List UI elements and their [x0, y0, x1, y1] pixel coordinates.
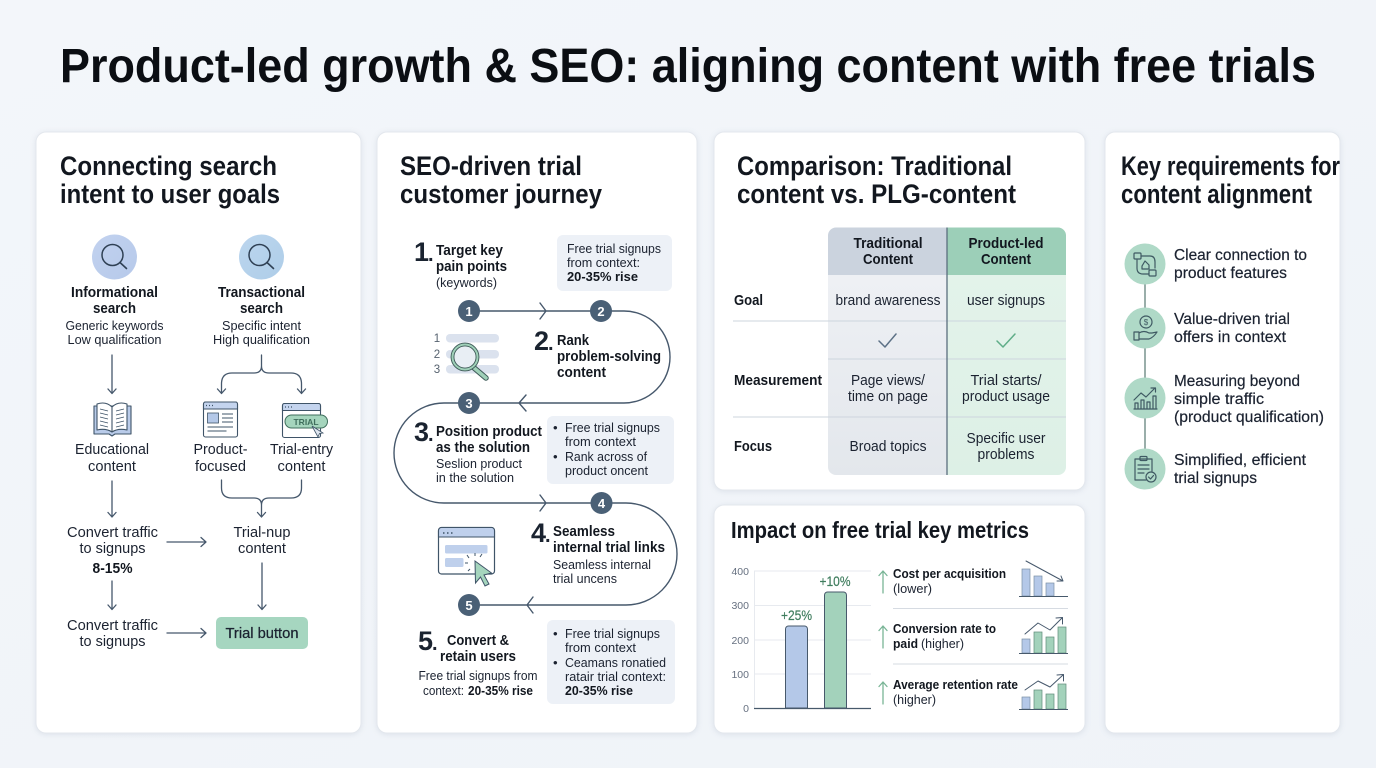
row: focus: Specific user: [966, 430, 1046, 447]
icon: clipboard signup: [1124, 448, 1166, 490]
callout: step 3 bullets: product oncent: [565, 463, 648, 478]
text: value-driven trial offers: offers in context: [1174, 329, 1287, 346]
heading: key requirements: [1121, 151, 1340, 209]
arrow: merge to trial-nup: [222, 480, 302, 517]
label: educational content: content: [88, 458, 137, 475]
arrow: transactional branch: [218, 355, 306, 394]
row: focus: Broad topics: [850, 438, 926, 455]
callout: step 3 bullets: Rank across of: [565, 449, 647, 464]
icon: check product-led: [997, 334, 1015, 347]
row: focus: Focus: [734, 438, 772, 455]
metric: conversion rate to paid: [879, 618, 1068, 654]
button: trial button: Trial button: [226, 625, 298, 642]
icon: trial entry browser with button: [282, 404, 328, 438]
callout: 20-35% rise: [557, 235, 672, 291]
icon: product page browser: [204, 402, 238, 437]
panel: connecting search intent to user goals: [36, 132, 361, 733]
text: measuring beyond traffic: Measuring beyond: [1174, 373, 1300, 390]
text: convert traffic to signups: Convert traffic: [67, 617, 158, 634]
label: educational content: Educational: [75, 441, 149, 458]
icon: ranked list with magnifier: [434, 333, 499, 378]
step 3 text: .: [428, 424, 434, 446]
step 1 text: Target key: [436, 242, 504, 259]
icon: trial entry browser with button: TRIAL: [293, 417, 319, 427]
step 2 text: problem-solving: [557, 348, 661, 365]
step 5 text: 5: [418, 626, 433, 656]
step marker 5: 5: [465, 598, 473, 613]
step 5 text: retain users: [440, 648, 516, 665]
text: trial-nup content: Trial-nup: [234, 524, 290, 541]
icon: open book: [94, 403, 131, 436]
icon: value offer hand: [1124, 308, 1166, 348]
icon: ranked list with magnifier: 3: [434, 364, 440, 376]
text: transactional search: Specific intent: [222, 318, 301, 333]
row: goal: user signups: [967, 292, 1045, 309]
step 2 text: 2: [534, 326, 549, 356]
callout: step 5 bullets: [547, 620, 675, 704]
panel: SEO-driven trial customer journey: [377, 132, 697, 733]
arrow: to trial button: [167, 628, 206, 638]
panel: comparison table: [714, 132, 1085, 490]
step 2 text: .: [548, 333, 554, 355]
text: convert traffic to signups: to signups: [80, 633, 146, 650]
text: informational search: Low qualification: [68, 332, 162, 347]
text: clear connection: product features: [1174, 265, 1287, 282]
step 2 text: content: [557, 364, 606, 381]
step 4 text: internal trial links: [553, 539, 665, 556]
text: convert traffic 8-15%: Convert traffic: [67, 524, 158, 541]
metric: cost per acquisition: [879, 561, 1068, 596]
heading: SEO-driven journey: customer journey: [400, 179, 602, 209]
journey path: [394, 303, 677, 613]
metric: conversion rate to paid: paid: [893, 637, 918, 651]
icon: browser with cursor: [438, 528, 494, 586]
step marker 3: [458, 392, 480, 414]
text: clear connection: Clear connection to: [1174, 247, 1307, 264]
text: trial-nup content: [234, 524, 290, 557]
callout: step 5 bullets: 20-35% rise: [565, 683, 633, 698]
callout: step 5 bullets: •: [553, 626, 558, 641]
step 3 text: Position product: [436, 423, 542, 440]
row: goal: [734, 292, 1045, 309]
text: convert traffic 8-15%: [67, 524, 158, 577]
icon: check traditional: [879, 334, 896, 347]
metric: conversion rate to paid: Conversion rate to: [893, 622, 996, 636]
step marker 2: 2: [597, 304, 605, 319]
heading: connecting search: [60, 151, 280, 209]
text: value-driven trial offers: Value-driven trial: [1174, 311, 1290, 328]
bar chart: [731, 566, 871, 715]
metric: average retention rate: Average retention rate: [893, 678, 1018, 692]
arrow: informational to educational: [108, 355, 116, 394]
row: focus: [734, 430, 1046, 463]
text: trial-nup content: content: [238, 540, 287, 557]
callout: step 3 bullets: from context: [565, 434, 636, 449]
step 1 text: pain points: [436, 258, 507, 275]
text: value-driven trial offers: [1174, 311, 1290, 346]
bar chart: +25%: [781, 608, 812, 623]
callout: step 5 bullets: •: [553, 655, 558, 670]
icon: ranked list with magnifier: 2: [434, 349, 440, 361]
row: measurement: product usage: [962, 388, 1050, 405]
header: traditional content: [854, 235, 922, 268]
header: traditional content: Content: [863, 251, 913, 268]
step 3 text: [414, 417, 542, 485]
label: product-focused: focused: [195, 458, 246, 475]
text: simplified signups: trial signups: [1174, 470, 1257, 487]
step 3 text: in the solution: [436, 470, 514, 485]
text: simplified signups: Simplified, efficient: [1174, 452, 1307, 469]
text: convert traffic 8-15%: 8-15%: [92, 560, 132, 577]
icon: informational search magnifier: [92, 234, 137, 280]
heading: SEO-driven journey: [400, 151, 602, 209]
arrow: to trial-nup content: [167, 538, 206, 546]
step 4 text: trial uncens: [553, 571, 617, 586]
bar chart: 100: [731, 669, 749, 681]
step 4 text: 4: [531, 518, 546, 548]
step 4 text: .: [545, 525, 551, 547]
icon: value offer hand: $: [1144, 318, 1149, 327]
step 5 text: 20-35% rise: [468, 683, 533, 698]
text: informational search: Generic keywords: [66, 318, 164, 333]
row: goal: Goal: [734, 292, 763, 309]
label: trial-entry content: [270, 441, 333, 475]
row: goal: brand awareness: [836, 292, 940, 309]
title: Product-led growth & SEO: aligning content with free trials: [60, 40, 1316, 93]
step 5 text: .: [432, 633, 438, 655]
step 3 text: 3: [414, 417, 429, 447]
header: product-led content: Content: [981, 251, 1031, 268]
row: measurement: Page views/: [851, 372, 926, 389]
icon: growth chart: [1124, 378, 1166, 418]
callout: 20-35% rise: 20-35% rise: [567, 269, 638, 284]
row: measurement: Measurement: [734, 372, 822, 389]
step 1 text: (keywords): [436, 275, 497, 290]
header: product-led content: Product-led: [968, 235, 1044, 252]
heading: impact: Impact on free trial key metrics: [731, 517, 1029, 543]
callout: step 3 bullets: [547, 416, 674, 484]
metric: average retention rate: (higher): [893, 693, 936, 707]
label: product-focused: Product-: [194, 441, 248, 458]
step 4 text: Seamless: [553, 523, 615, 540]
step marker 5: [458, 594, 480, 616]
metric: average retention rate: [879, 674, 1068, 710]
text: measuring beyond traffic: [1174, 373, 1324, 426]
button: trial button: [216, 617, 308, 649]
callout: step 5 bullets: from context: [565, 640, 636, 655]
step 3 text: as the solution: [436, 439, 530, 456]
divider: [893, 663, 1068, 665]
bar chart: 400: [731, 566, 749, 578]
icon: transactional search magnifier: [239, 234, 284, 280]
callout: step 3 bullets: •: [553, 449, 558, 464]
step marker 1: 1: [465, 304, 473, 319]
step 2 text: Rank: [557, 332, 590, 349]
step 4 text: Seamless internal: [553, 557, 651, 572]
panel: key requirements: [1105, 132, 1340, 733]
label: trial-entry content: content: [278, 458, 326, 475]
callout: step 3 bullets: •: [553, 420, 558, 435]
row: measurement: Trial starts/: [970, 372, 1042, 389]
divider: [893, 608, 1068, 610]
icon: ranked list with magnifier: 1: [434, 333, 440, 345]
step 1 text: .: [428, 244, 434, 266]
step 5 text: [418, 626, 538, 698]
label: trial-entry content: Trial-entry: [270, 441, 333, 458]
text: transactional search: [213, 284, 310, 347]
step 4 text: [531, 518, 665, 586]
step marker 1: [458, 300, 480, 322]
step marker 3: 3: [465, 396, 473, 411]
icon: product features: [1124, 244, 1166, 284]
text: measuring beyond traffic: simple traffic: [1174, 391, 1264, 408]
callout: step 3 bullets: Free trial signups: [565, 420, 660, 435]
step marker 4: [590, 492, 612, 514]
label: educational content: [75, 441, 149, 475]
row: focus: problems: [978, 446, 1034, 463]
heading: comparison: content vs. PLG-content: [737, 179, 1016, 209]
callout: step 5 bullets: Free trial signups: [565, 626, 660, 641]
step 5 text: Free trial signups from: [418, 668, 538, 683]
arrow: educational to convert: [108, 481, 116, 517]
bar chart: 0: [743, 703, 749, 715]
header: product-led content: [968, 235, 1044, 268]
heading: comparison: Comparison: Traditional: [737, 151, 1012, 181]
step marker 2: [590, 300, 612, 322]
callout: 20-35% rise: from context:: [567, 255, 640, 270]
text: convert traffic 8-15%: to signups: [80, 540, 146, 557]
step 1 text: [414, 237, 507, 290]
label: product-focused: [194, 441, 248, 475]
heading: connecting search: intent to user goals: [60, 179, 280, 209]
text: informational search: search: [93, 300, 136, 317]
heading: key requirements: content alignment: [1121, 179, 1312, 209]
header: traditional content: Traditional: [854, 235, 922, 252]
bar chart: 200: [731, 635, 749, 647]
text: informational search: [66, 284, 164, 347]
text: transactional search: Transactional: [218, 284, 305, 301]
text: clear connection: [1174, 247, 1307, 282]
table: [733, 228, 1066, 475]
text: measuring beyond traffic: (product qualification): [1174, 409, 1324, 426]
metric: cost per acquisition: (lower): [893, 582, 932, 596]
callout: step 5 bullets: Ceamans ronatied: [565, 655, 666, 670]
step 1 text: 1: [414, 237, 429, 267]
heading: SEO-driven journey: SEO-driven trial: [400, 151, 582, 181]
bar chart: +10%: [820, 574, 850, 589]
metric: conversion rate to paid: (higher): [921, 637, 964, 651]
text: simplified signups: [1174, 452, 1307, 487]
step 2 text: [534, 326, 661, 381]
metric: cost per acquisition: Cost per acquisition: [893, 567, 1006, 581]
text: transactional search: High qualification: [213, 332, 310, 347]
step 5 text: context:: [423, 683, 464, 698]
step 3 text: Seslion product: [436, 456, 522, 471]
callout: 20-35% rise: Free trial signups: [567, 241, 661, 256]
text: transactional search: search: [240, 300, 283, 317]
row: measurement: time on page: [848, 388, 928, 405]
callout: step 5 bullets: ratair trial context:: [565, 669, 666, 684]
panel: impact on free trial key metrics: [714, 505, 1085, 733]
step 5 text: Convert &: [447, 632, 509, 649]
text: informational search: Informational: [71, 284, 158, 301]
row: measurement: [734, 372, 1050, 405]
text: convert traffic to signups: [67, 617, 158, 650]
arrow: trial-nup to trial button: [258, 563, 266, 610]
timeline connector: [1144, 264, 1146, 469]
bar chart: 300: [731, 600, 749, 612]
heading: comparison: [737, 151, 1016, 209]
heading: connecting search: Connecting search: [60, 151, 277, 181]
arrow: convert to convert: [108, 581, 116, 610]
step marker 4: 4: [598, 496, 606, 511]
